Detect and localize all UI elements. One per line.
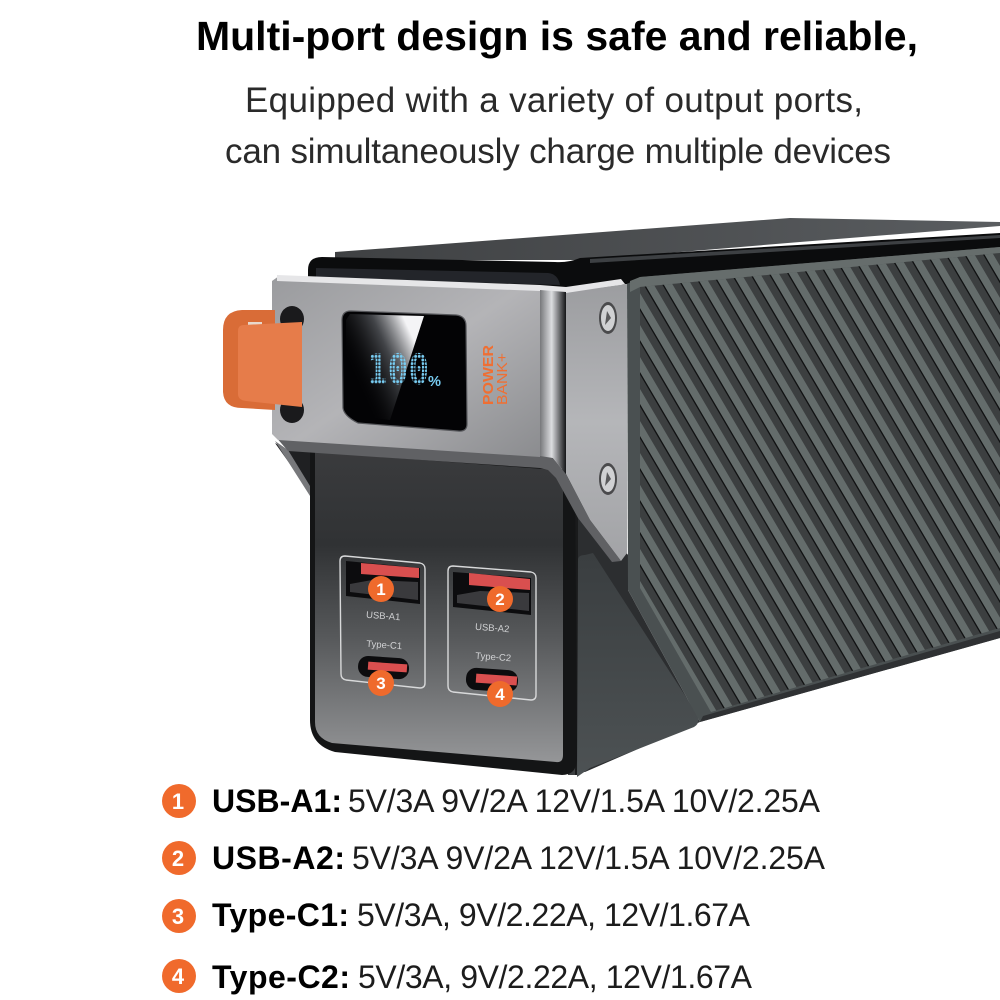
vertical body ridges — [563, 490, 578, 775]
metal lower diagonal edge — [275, 436, 621, 562]
spec row 3: 5V/3A, 9V/2.22A, 12V/1.67A — [357, 897, 751, 933]
spec row 4: Type-C2: — [212, 959, 350, 995]
subtitle — [225, 81, 891, 171]
port badge 4 — [487, 681, 513, 707]
side ribbed panel — [627, 247, 1000, 722]
percent sign: % — [428, 373, 441, 390]
display screen — [342, 311, 467, 431]
port badge 2: 2 — [495, 590, 505, 609]
port badge 1 — [368, 576, 394, 602]
metal crease — [540, 290, 566, 474]
port group 1: USB-A1 — [366, 610, 401, 623]
spec row 4: 5V/3A, 9V/2.22A, 12V/1.67A — [358, 959, 753, 995]
port badge 1: 1 — [376, 580, 386, 599]
port badge 3: 3 — [376, 674, 386, 693]
spec row 2: USB-A2: — [212, 840, 345, 876]
port group 2 — [448, 566, 536, 700]
port badge 4: 4 — [495, 685, 505, 704]
rear black recess — [316, 268, 560, 285]
spec row 4 — [162, 959, 753, 995]
metal side bracket — [566, 284, 627, 561]
left metal triangle — [275, 443, 312, 495]
spec row 2: 2 — [172, 846, 184, 871]
port group 2: Type-C2 — [475, 651, 511, 664]
subtitle: can simultaneously charge multiple devices — [225, 132, 891, 171]
band highlight — [590, 235, 1000, 263]
spec row 1: 1 — [172, 789, 184, 814]
subtitle: Equipped with a variety of output ports, — [245, 81, 863, 120]
front port faceplate — [315, 452, 563, 762]
spec row 3 — [162, 897, 751, 933]
title: Multi-port design is safe and reliable, — [196, 13, 918, 59]
lanyard holes — [280, 306, 304, 423]
brand text: BANK+ — [494, 353, 511, 405]
panel bottom edge — [700, 631, 1000, 722]
port badge 2 — [487, 586, 513, 612]
display reading: 100 — [367, 345, 429, 394]
left triangle rim — [275, 441, 310, 496]
spec row 3: 3 — [172, 904, 184, 929]
power bank illustration — [223, 218, 1000, 777]
top surface — [335, 218, 1000, 260]
screw top — [599, 302, 617, 334]
spec row 4: 4 — [172, 964, 185, 989]
port group 2: USB-A2 — [475, 622, 510, 635]
port group 1 — [340, 556, 425, 688]
port badge 3 — [368, 670, 394, 696]
spec row 2: 5V/3A 9V/2A 12V/1.5A 10V/2.25A — [352, 840, 826, 876]
spec row 3: Type-C1: — [212, 897, 349, 933]
metal top highlight — [277, 275, 625, 293]
stand foot — [577, 553, 698, 777]
brand text — [480, 345, 511, 405]
spec row 1: USB-A1: — [212, 783, 342, 819]
rib stripes — [640, 253, 1000, 712]
orange tab — [223, 310, 302, 410]
metal front bracket — [272, 276, 540, 457]
brand text: POWER — [480, 345, 497, 405]
spec row 1: 5V/3A 9V/2A 12V/1.5A 10V/2.25A — [348, 783, 821, 819]
dark body block under bracket — [560, 468, 700, 772]
port group 1: Type-C1 — [366, 639, 402, 652]
panel top rim — [630, 247, 1000, 292]
front lower frame — [310, 450, 577, 775]
screw bottom — [599, 463, 617, 495]
black top edge band — [308, 233, 1000, 288]
